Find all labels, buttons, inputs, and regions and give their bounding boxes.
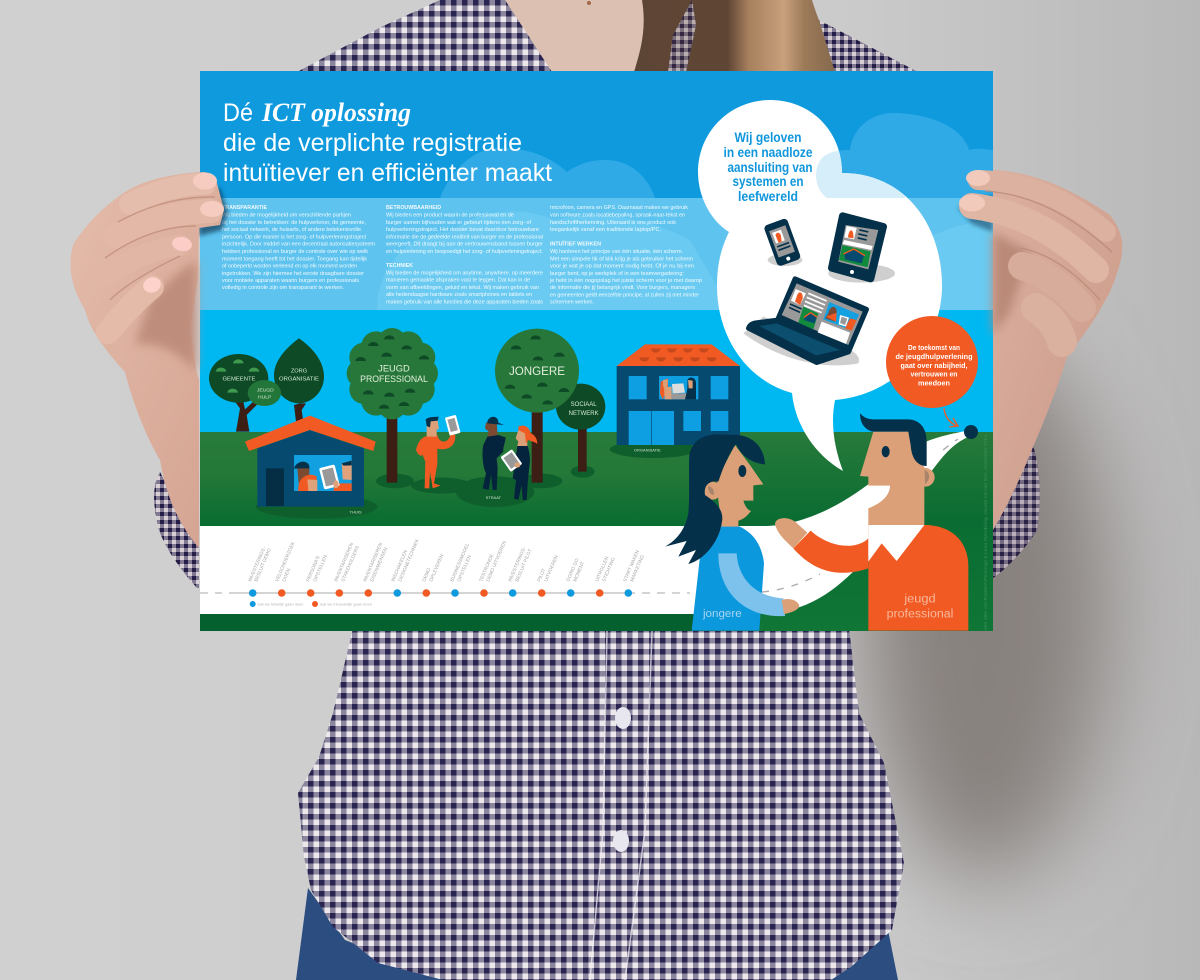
title: intuïtiever en efficiënter maakt <box>223 159 552 187</box>
tree: jeugd hulp: JEUGD <box>257 388 274 394</box>
house: thuis <box>245 416 376 515</box>
callout: orange circle: vertrouwen en <box>910 370 958 378</box>
text column: transparantie: voor mobiele apparaten waarin burgers en professionals <box>222 278 359 284</box>
timeline <box>200 538 690 607</box>
bottom strip <box>200 614 700 631</box>
text column: intuitief werken: en gemeenten geldt eenzelfde principe, al zullen zij met minder <box>550 292 699 298</box>
finger shadow on poster <box>199 188 228 236</box>
text column: transparantie: volledig in controle zijn om transparant te werken. <box>222 285 344 291</box>
step labels: STICHTING <box>601 556 617 583</box>
end dot of path <box>964 425 978 439</box>
tree: sociaal netwerk <box>556 384 605 472</box>
text column: betrouwbaarheid en techniek: TECHNIEK <box>386 263 414 269</box>
text column: intuitief werken: voor je wat je op dat moment nodig hebt. Of je nu bij een <box>550 264 694 270</box>
step labels: BESLUIT DEMO <box>253 547 273 583</box>
nails <box>193 172 217 190</box>
jongere hair <box>665 434 765 564</box>
low sky <box>200 310 993 432</box>
creases <box>105 197 215 300</box>
text column: intuitief werken: microfoon, camera en GPS. Daarnaast maken we gebruik <box>550 205 688 211</box>
person: orange professional <box>416 415 461 488</box>
bubble text <box>724 129 813 204</box>
text column: transparantie: of onbeperkt worden verleend en op elk moment worden <box>222 264 357 270</box>
poster <box>200 71 993 631</box>
text column: betrouwbaarheid en techniek <box>385 205 544 306</box>
tree: gemeente: GEMEENTE <box>222 377 256 383</box>
tree: sociaal netwerk: NETWERK <box>569 411 599 417</box>
icon: phone <box>763 218 802 267</box>
hand silhouette <box>71 172 224 548</box>
step labels: BUSINESSMODEL <box>449 542 471 583</box>
bubble text: aansluiting van <box>728 159 812 175</box>
legend <box>250 601 372 607</box>
tree: zorg organisatie <box>274 338 324 422</box>
grass <box>200 432 993 526</box>
step labels: BESLUIT PILOT <box>514 548 534 583</box>
ground shadows <box>256 466 595 519</box>
icon: tablet <box>828 216 895 283</box>
shirt placket <box>590 631 652 980</box>
text column: transparantie: persoon. Op die manier is het zorg- of hulpverleningstraject <box>222 234 366 240</box>
step labels: INSCHAKELEN <box>390 549 409 583</box>
tree: jeugd hulp <box>248 380 281 406</box>
step labels: UITVOEREN <box>543 554 560 583</box>
person: orange-haired girl <box>486 426 537 500</box>
text column: transparantie: Wij bieden de mogelijkheid om verschillende partijen <box>222 212 351 218</box>
left hand and arm <box>71 172 228 548</box>
woman: jeans <box>296 888 898 980</box>
palm shading <box>993 232 1030 335</box>
step labels: DEMO <box>421 567 433 583</box>
step labels: VELDONDERZOEK <box>274 540 297 583</box>
character: jongere <box>665 434 799 631</box>
woman: shirt below poster <box>298 628 904 980</box>
woman: neck, hair and shoulders above poster <box>297 0 918 72</box>
text column: intuitief werken: Wij hanteren het principe van één situatie, één scherm. <box>550 249 683 255</box>
legend: wat we telkelijk gaan doen <box>258 602 304 606</box>
right hand and arm <box>958 170 1122 530</box>
jongere sleeve <box>718 553 785 616</box>
text column: intuitief werken: INTUÏTIEF WERKEN <box>550 240 601 248</box>
professional hair <box>860 413 927 466</box>
step labels: PILOT <box>536 568 547 583</box>
dashed connector <box>229 592 635 594</box>
text column: transparantie: het sociaal netwerk, de huisarts, of andere betekenisvolle <box>222 227 362 233</box>
cloud: right <box>816 113 993 198</box>
text column: betrouwbaarheid en techniek: en hulpverlening en bespoedigt het zorg- of hulpverleningstraject. <box>386 249 543 255</box>
tree: jeugd professional: JEUGD <box>378 364 410 374</box>
jongere head <box>717 445 763 527</box>
callout: orange circle: de jeugdhulpverlening <box>896 352 973 361</box>
text column: transparantie: TRANSPARANTIE <box>222 205 267 211</box>
white path band <box>200 431 968 614</box>
building: organisatie: ORGANISATIE <box>634 447 661 452</box>
title <box>223 98 552 187</box>
window people and laptop <box>660 378 696 399</box>
icon: laptop <box>743 279 867 365</box>
dashed route over path <box>762 439 958 592</box>
button <box>613 830 629 852</box>
text column: intuitief werken: toegankelijk vanaf een traditionele laptop/PC. <box>550 227 661 233</box>
text column: transparantie: inzichtelijk. Door middel van een decentraal autorisatiesysteem <box>222 242 375 248</box>
bubble text: leefwereld <box>738 188 798 204</box>
bubble text: in een naadloze <box>724 144 813 160</box>
tree: jeugd professional <box>347 328 438 483</box>
fingers <box>978 180 1106 232</box>
step labels: MARKETING <box>629 554 646 583</box>
legend: wat we inhoudelijk gaan doen <box>320 602 372 606</box>
text column: betrouwbaarheid en techniek: Wij bieden een product waarin de professional en de <box>386 212 515 218</box>
text column: betrouwbaarheid en techniek: burger samen bijhouden wat er gebeurt tijdens een zorg- of <box>386 220 531 226</box>
text column: transparantie <box>222 205 375 291</box>
poster: dark sky <box>200 71 993 201</box>
tree: zorg organisatie: ZORG <box>291 369 307 375</box>
pale cloud inside bubble <box>816 150 905 198</box>
step labels: DEMO UITVOEREN <box>485 540 508 583</box>
fingers <box>130 184 205 204</box>
jongere hand <box>782 599 799 614</box>
text panel <box>200 198 993 310</box>
arrow to end of path <box>944 408 958 427</box>
panel cloud <box>377 211 730 310</box>
tree: zorg organisatie: ORGANISATIE <box>279 376 319 382</box>
label: jeugd professional: professional <box>887 606 953 620</box>
creases <box>985 191 1112 300</box>
hand silhouette <box>993 170 1122 530</box>
title: ICT oplossing <box>261 98 411 127</box>
bubble text: Wij geloven <box>734 129 802 145</box>
text column: intuitief werken: burger bent, op je werkplek of in een teamvergadering: <box>550 271 684 277</box>
label: jongere: jongere <box>702 608 742 620</box>
text column: transparantie: ingetrokken. We zijn hiermee het eerste draagbare dossier <box>222 271 364 277</box>
tree: jongere: JONGERE <box>509 364 565 378</box>
label: jeugd professional: jeugd <box>903 592 936 606</box>
person: capped youth <box>483 417 506 490</box>
step labels: OPSTELLEN <box>312 554 329 583</box>
tree: gemeente <box>209 354 268 432</box>
step dots <box>249 589 632 597</box>
text column: intuitief werken: handschriftherkenning. Uiteraard is ons product ook <box>550 220 676 226</box>
callout: orange circle: meedoen <box>918 378 950 388</box>
professional collar <box>868 525 924 562</box>
step labels: PERSONA'S <box>305 555 322 583</box>
text column: betrouwbaarheid en techniek: vorm van afbeeldingen, geluid en tekst. Wij maken gebruik van <box>386 285 539 291</box>
devices <box>743 216 895 365</box>
tree: jeugd hulp: HULP <box>258 394 272 400</box>
title: die de verplichte registratie <box>223 129 522 157</box>
text column: intuitief werken: van software zoals locatiebepaling, spraak-naar-tekst en <box>550 212 685 218</box>
text column: transparantie: bij het dossier te betrekken: de hulpverlener, de gemeente, <box>222 220 366 226</box>
text column: intuitief werken: schermen werken. <box>550 300 594 306</box>
step labels <box>247 538 646 583</box>
professional body <box>868 525 968 631</box>
house: thuis: THUIS <box>350 510 362 515</box>
label: jeugd professional <box>887 592 953 620</box>
text column: transparantie: hebben professional en burger de controle over wie op welk <box>222 249 368 255</box>
step labels: INVESTERINGS- <box>247 546 268 583</box>
step labels: EISEN/WENSEN <box>369 546 389 583</box>
step labels: DOEN <box>281 567 292 583</box>
finger shadow on poster <box>958 195 993 232</box>
step labels: MOMENT <box>572 561 586 583</box>
step labels: STAKEHOLDERS <box>340 545 361 583</box>
step labels: UITROLLEN <box>594 555 611 583</box>
text column: betrouwbaarheid en techniek: weergeeft. Dit draagt bij aan de vertrouwensband tussen burger <box>385 242 543 248</box>
callout: orange circle: De toekomst van <box>908 343 960 352</box>
step labels: START MAKEN <box>622 549 641 583</box>
text column: betrouwbaarheid en techniek: hulpverleningstraject. Het dossier bevat daardoor betrouwbare <box>386 227 540 233</box>
colophon: een idee van Robbert Pennings & Leon Overdiking, visuals Ira van Son, november 2014 <box>983 435 989 630</box>
callout: orange circle: gaat over nabijheid, <box>900 361 968 370</box>
text column: betrouwbaarheid en techniek: manieren gemaakte afspraken vast te leggen. Dat kan in de <box>386 278 531 284</box>
step labels: INVENTARISEREN <box>333 542 355 583</box>
step labels: DESIGN&TECHNIEK <box>397 538 421 583</box>
bubble text: systemen en <box>732 173 804 189</box>
step labels: OPLEVEREN <box>428 553 446 583</box>
jongere body <box>692 526 764 631</box>
nails <box>966 170 990 186</box>
tree: jongere <box>495 329 579 483</box>
text column: transparantie: moment toegang heeft tot het dossier. Toegang kan tijdelijk <box>222 256 367 262</box>
text column: betrouwbaarheid en techniek: maken gebruik van alle functies die deze apparaten bieden zoals <box>386 300 543 306</box>
step labels: TESTRONDE <box>478 553 495 583</box>
palm shading <box>135 262 196 372</box>
text column: betrouwbaarheid en techniek: informatie die de gedeelde realiteit van burger en de professional <box>386 234 543 240</box>
professional arm <box>793 531 868 573</box>
title: Dé <box>223 99 253 127</box>
illustrated scene: left and middle <box>209 328 605 519</box>
woman: sleeves <box>154 445 1040 590</box>
callout: orange circle <box>886 316 978 408</box>
text column: intuitief werken: de informatie die jij belangrijk vindt. Voor burgers, managers <box>550 285 695 291</box>
text column: intuitief werken <box>549 205 703 306</box>
step labels: OPSTELLEN <box>456 554 473 583</box>
step labels: INVESTERINGS- <box>507 546 528 583</box>
button <box>615 707 631 729</box>
text column: intuitief werken: Met een simpele tik of klik krijg je als gebruiker het scherm <box>550 256 693 262</box>
speech bubble <box>698 100 942 471</box>
tree: jeugd professional: PROFESSIONAL <box>360 374 428 384</box>
tree: sociaal netwerk: SOCIAAL <box>571 402 597 408</box>
text column: intuitief werken: je hebt in één oogopslag het juiste scherm voor je met daarop <box>549 278 703 284</box>
step labels: INVENTARISEREN <box>362 542 384 583</box>
professional hand <box>775 518 807 548</box>
building: organisatie <box>610 344 740 458</box>
window people <box>294 461 352 491</box>
professional head <box>860 432 924 525</box>
step labels: GO/NO GO <box>565 557 581 583</box>
character: jeugd professional <box>775 413 968 631</box>
text column: betrouwbaarheid en techniek: alle hedendaagse hardware zoals smartphones en tablets en <box>386 292 532 298</box>
text column: betrouwbaarheid en techniek: BETROUWBAARHEID <box>386 205 441 211</box>
person: orange-haired girl: STRAAT <box>486 495 502 500</box>
text column: betrouwbaarheid en techniek: Wij bieden de mogelijkheid om anytime, anywhere, op meerdere <box>386 270 544 276</box>
cloud: centre <box>440 148 655 198</box>
